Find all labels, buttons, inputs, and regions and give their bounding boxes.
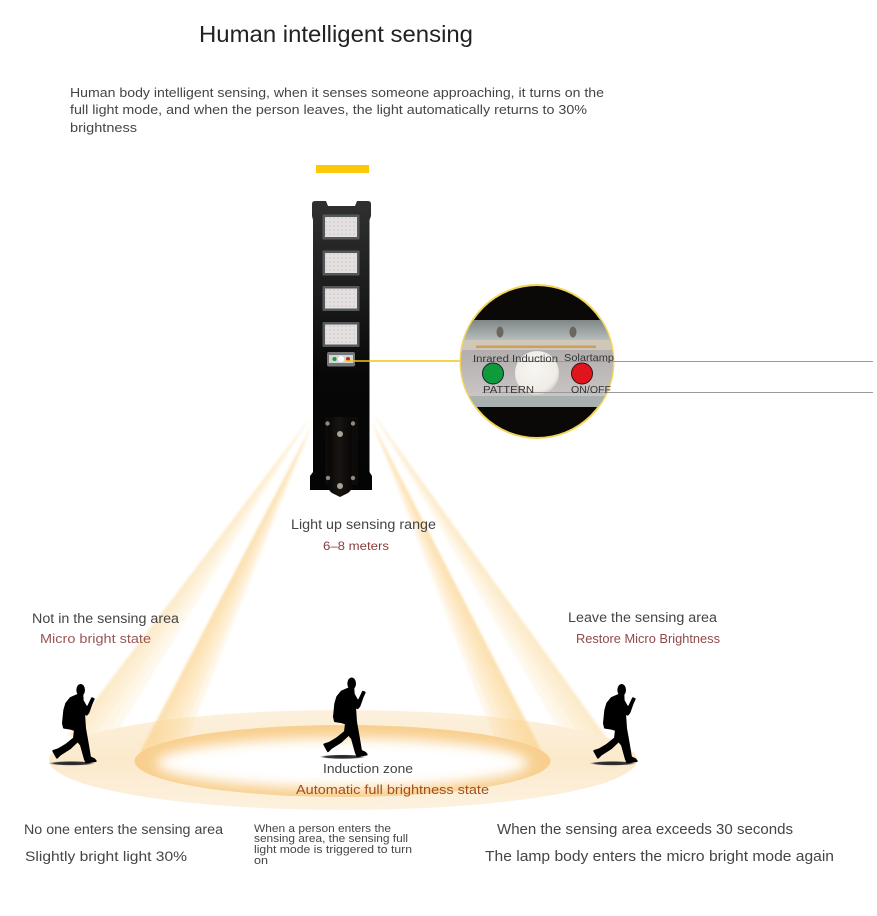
induction zone label: Induction zone xyxy=(323,761,413,776)
left state label: Not in the sensing area xyxy=(32,611,180,626)
intro text xyxy=(70,85,604,135)
PIR sensor dome xyxy=(515,351,559,395)
red button xyxy=(572,363,592,384)
person left xyxy=(48,684,96,765)
caption: person enters: sensing area, the sensing full xyxy=(254,833,408,845)
connector line: lamp sensor to detail xyxy=(346,360,463,362)
caption: exceeds 30 seconds: When the sensing area exceeds 30 seconds xyxy=(497,822,793,838)
title: Human intelligent sensing xyxy=(199,21,473,47)
sensor module xyxy=(327,352,355,366)
mounting bracket xyxy=(325,417,358,497)
screws xyxy=(496,326,576,338)
lamp body xyxy=(310,201,372,490)
caption: person enters: light mode is triggered to turn xyxy=(254,844,412,856)
lens labels: PATTERN xyxy=(483,384,534,396)
LED panel 3 xyxy=(322,286,360,311)
sensing range label: 6–8 meters xyxy=(323,539,389,553)
green button xyxy=(482,363,504,384)
left inner light beam xyxy=(140,425,312,752)
lens labels xyxy=(473,352,614,396)
right state label: Leave the sensing area xyxy=(568,610,718,625)
caption: no one enters: Slightly bright light 30% xyxy=(25,848,187,864)
caption: exceeds 30 seconds xyxy=(485,822,834,865)
right state label: Restore Micro Brightness xyxy=(576,632,720,646)
person right xyxy=(589,684,637,765)
sensing range label: Light up sensing range xyxy=(291,517,436,532)
outer ground ellipse xyxy=(49,710,637,810)
detail lens: sensor module xyxy=(455,285,620,438)
caption: person enters xyxy=(254,823,412,867)
left state label xyxy=(32,611,180,646)
caption: no one enters xyxy=(24,822,224,864)
right state label xyxy=(568,610,720,646)
LED panel 2 xyxy=(322,250,360,276)
lens labels: ON/OFF xyxy=(571,384,611,396)
right inner light beam xyxy=(371,420,541,750)
accent bar xyxy=(316,165,369,173)
LED panel 1 xyxy=(322,214,360,240)
button panel xyxy=(455,350,620,396)
caption: person enters: on xyxy=(254,855,268,867)
outer light beams xyxy=(68,412,625,763)
leader lines xyxy=(472,362,873,392)
caption: no one enters: No one enters the sensing area xyxy=(24,822,224,837)
intro text: full light mode, and when the person leaves, the light automatically returns to 30% xyxy=(70,102,587,117)
induction zone label: Automatic full brightness state xyxy=(296,782,489,797)
LED panel 4 xyxy=(322,322,360,347)
left state label: Micro bright state xyxy=(40,632,151,646)
lamp xyxy=(310,201,372,497)
sensing range label xyxy=(291,517,436,553)
lens labels: Inrared Induction xyxy=(473,353,558,365)
person center xyxy=(319,677,367,759)
intro text: Human body intelligent sensing, when it senses someone approaching, it turns on the xyxy=(70,85,604,100)
lens labels: Solartamp xyxy=(564,352,614,364)
caption: exceeds 30 seconds: The lamp body enters the micro bright mode again xyxy=(485,849,834,865)
inner induction ellipse xyxy=(134,725,550,797)
intro text: brightness xyxy=(70,120,138,135)
caption: person enters: When a person enters the xyxy=(254,823,391,835)
induction zone label xyxy=(296,761,489,797)
metal housing xyxy=(455,320,620,407)
